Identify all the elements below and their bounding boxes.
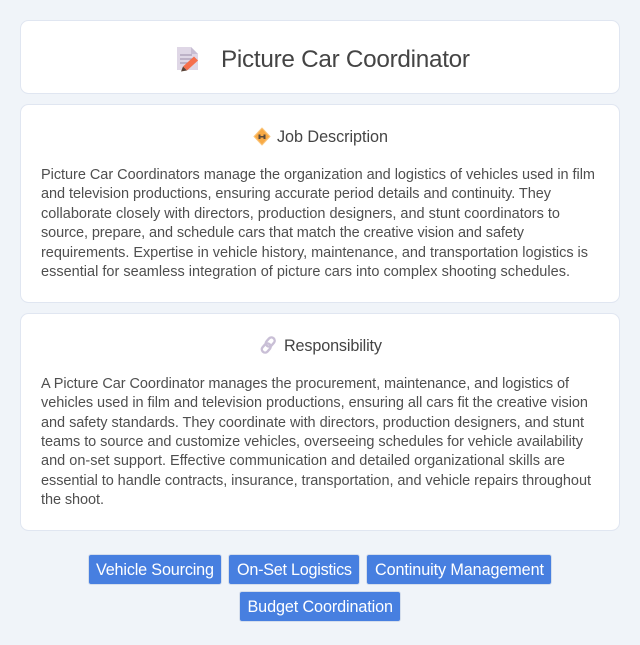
responsibility text: and safety standards. They coordinate with directors, production designers, and stunt — [41, 415, 584, 431]
responsibility text: vehicles used in film and television productions, ensuring all cars fit the creative vision — [41, 395, 588, 411]
responsibility text: essential to handle contracts, insurance, transportation, and vehicle repairs throughout — [41, 473, 591, 489]
job description text: collaborate closely with directors, production designers, and stunt coordinators to — [41, 206, 560, 222]
job description text — [41, 167, 595, 280]
job description text: and television productions, ensuring accurate period details and continuity. They — [41, 186, 552, 202]
tag: continuity management — [366, 554, 552, 584]
tag: vehicle sourcing — [88, 554, 222, 584]
responsibility text: and on-set support. Effective communication and detailed organizational skills are — [41, 453, 565, 469]
responsibility text — [41, 376, 591, 508]
heading: job description: Job Description — [277, 128, 388, 146]
tag: vehicle sourcing: Vehicle Sourcing — [96, 561, 214, 579]
job description text: source, prepare, and schedule cars that match the creative vision and safety — [41, 225, 525, 241]
responsibility text: the shoot. — [41, 492, 104, 508]
panel: title card — [20, 20, 620, 94]
title: Picture Car Coordinator — [221, 46, 470, 73]
tag group — [88, 554, 552, 622]
icon: chain link — [260, 336, 276, 354]
tag: continuity management: Continuity Management — [375, 561, 544, 579]
panel: job description — [20, 104, 620, 302]
heading: responsibility: Responsibility — [284, 337, 383, 355]
tag: on-set logistics — [228, 554, 360, 584]
icon: orange diamond sign — [254, 128, 270, 145]
icon: memo with pencil — [177, 47, 198, 72]
job description text: requirements. Expertise in vehicle history, maintenance, and transportation logistics is — [41, 245, 588, 261]
tag: on-set logistics: On-Set Logistics — [237, 561, 352, 579]
responsibility text: teams to source and customize vehicles, overseeing schedules for vehicle availability — [41, 434, 584, 450]
tag: budget coordination: Budget Coordination — [248, 598, 393, 616]
responsibility text: A Picture Car Coordinator manages the procurement, maintenance, and logistics of — [41, 376, 570, 392]
job description text: Picture Car Coordinators manage the organization and logistics of vehicles used in film — [41, 167, 595, 183]
tag: budget coordination — [240, 592, 400, 622]
panel: responsibility — [20, 314, 620, 530]
job description text: essential for seamless integration of picture cars into complex shooting schedules. — [41, 264, 570, 280]
